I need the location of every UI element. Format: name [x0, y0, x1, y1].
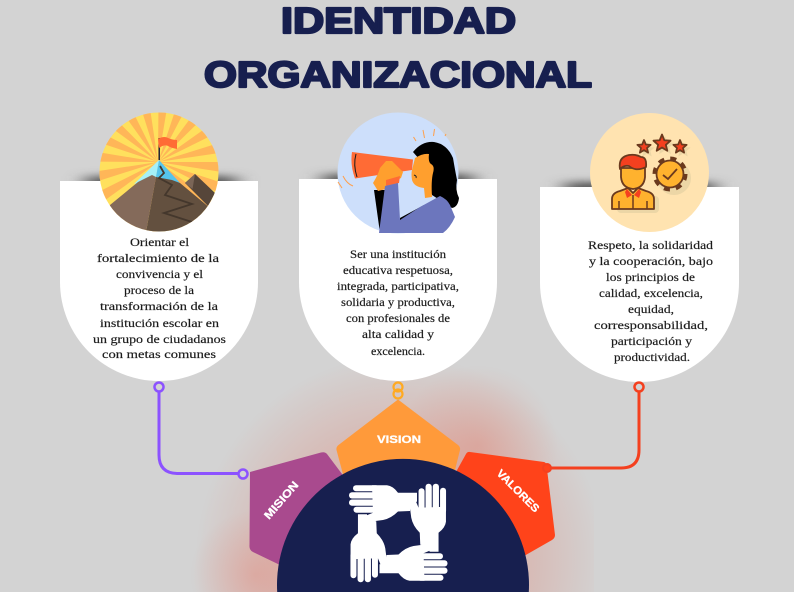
red glow behind emblem [180, 355, 594, 592]
shape: vision pentagon [336, 400, 460, 478]
text: valores: productividad. [614, 350, 690, 364]
label: mision: MISION [262, 479, 301, 522]
icon: four joined hands [349, 484, 448, 582]
connector: mision [154, 382, 248, 478]
text: vision: educativa respetuosa, [343, 263, 453, 277]
title [204, 0, 592, 95]
panel: mision card [60, 176, 258, 381]
shape: valores pentagon [456, 452, 555, 556]
text: mision: un grupo de ciudadanos [93, 332, 226, 346]
title: ORGANIZACIONAL [204, 54, 592, 95]
label: vision: VISION [377, 434, 421, 446]
text: vision: Ser una institución [350, 247, 446, 261]
text: valores: corresponsabilidad, [594, 318, 708, 332]
text: vision [337, 247, 459, 358]
label: valores: VALORES [494, 468, 541, 515]
text: valores: equidad, [628, 302, 674, 316]
text: valores: participación y [611, 334, 692, 348]
icon: mountain with flag [100, 112, 218, 240]
icon: person with gear and stars [590, 113, 709, 232]
text: valores [588, 238, 713, 364]
emblem: navy half circle [277, 459, 529, 592]
panel: valores card [540, 182, 739, 382]
text: mision: con metas comunes [102, 347, 216, 361]
icon shadows [617, 136, 691, 213]
icon: woman with megaphone [338, 112, 459, 234]
connector: valores [551, 382, 644, 468]
panel: vision card [299, 174, 497, 381]
text: mision: convivencia y el [116, 267, 204, 281]
text: vision: alta calidad y [362, 327, 434, 341]
text: mision: institución escolar en [100, 316, 219, 330]
text: mision [93, 235, 226, 361]
text: vision: solidaria y productiva, [341, 295, 455, 309]
text: valores: calidad, excelencia, [599, 286, 703, 300]
text: mision: Orientar el [130, 235, 190, 249]
text: valores: y la cooperación, bajo [589, 254, 713, 268]
title: IDENTIDAD [281, 0, 516, 41]
text: vision: excelencia. [371, 344, 425, 358]
valores connector end [543, 464, 551, 472]
text: valores: Respeto, la solidaridad [588, 238, 713, 252]
text: mision: proceso de la [124, 283, 195, 297]
text: vision: integrada, participativa, [337, 279, 459, 293]
text: vision: con profesionales de [346, 311, 450, 325]
text: valores: los principios de [606, 270, 695, 284]
text: mision: transformación de la [100, 299, 219, 313]
text: mision: fortalecimiento de la [97, 251, 220, 265]
shape: mision pentagon [249, 452, 345, 565]
connector: vision [394, 382, 402, 398]
